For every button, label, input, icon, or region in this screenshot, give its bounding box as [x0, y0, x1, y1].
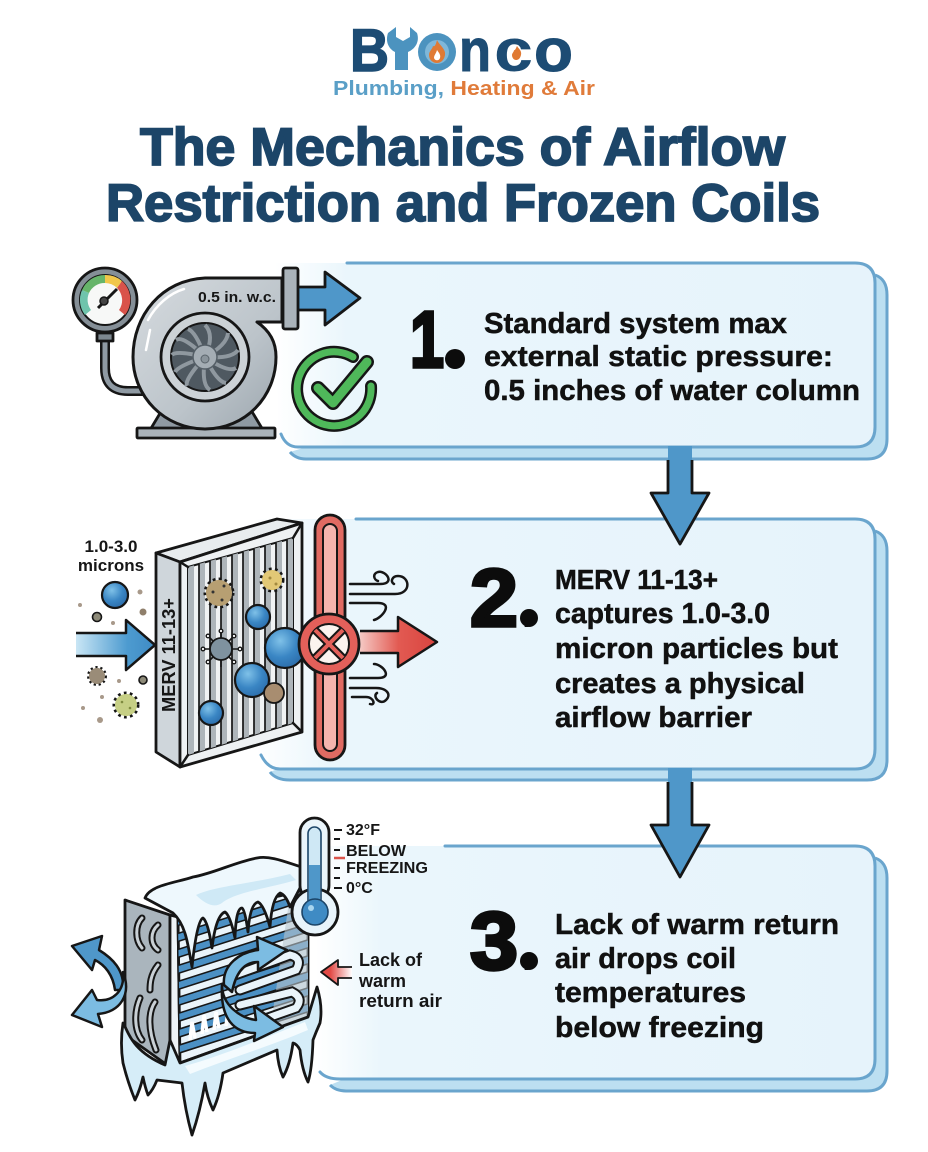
pollen particles: [89, 570, 284, 716]
step 1 text: [484, 308, 860, 407]
step 2 text: micron particles but: [555, 633, 838, 665]
icon: flame letter o: [418, 33, 456, 71]
panel 2 back card: [270, 531, 887, 780]
filter pleats: [188, 530, 293, 765]
step 1 text: Standard system max: [484, 308, 787, 340]
coil side plate: [125, 900, 180, 1067]
restriction valve: [299, 515, 359, 760]
return air arrow: [321, 960, 352, 985]
airflow in arrow: [76, 620, 155, 670]
temperature scale: FREEZING: [346, 860, 428, 877]
red airflow out arrow: [360, 617, 437, 667]
panel 1 back card: [290, 275, 887, 459]
step 3 text: temperatures: [555, 977, 746, 1009]
gauge pipe: [97, 333, 145, 391]
pump outlet flange: [283, 268, 298, 329]
panel: step 2: [255, 519, 887, 780]
title: [106, 118, 820, 233]
coil fins: [176, 891, 310, 1061]
virus particle: [201, 629, 242, 667]
step number 3: .: [523, 949, 530, 976]
illustration: MERV filter: [76, 515, 437, 767]
step 2 text: airflow barrier: [555, 702, 752, 734]
connector arrow 1 to 2: [651, 446, 709, 544]
panel: step 3: [315, 846, 887, 1091]
ice bottom with icicles: [122, 987, 321, 1135]
blue particles: [102, 582, 305, 725]
pressure gauge: [73, 268, 137, 332]
dust rings: [92, 612, 147, 684]
icon: wrench letter r: [387, 27, 418, 70]
logo tagline: Plumbing, Heating & Air: [333, 78, 595, 100]
pressure label: 0.5 in. w.c.: [198, 289, 276, 306]
thermometer: [292, 818, 338, 935]
temperature scale: BELOW: [346, 843, 407, 860]
logo wordmark: o: [534, 17, 573, 84]
panel 3 back card: [330, 858, 887, 1091]
step number 1: 1: [410, 295, 444, 384]
pump housing: [133, 278, 282, 429]
step number 1: .: [449, 344, 456, 374]
title: Restriction and Frozen Coils: [106, 174, 820, 233]
step 3 text: below freezing: [555, 1012, 764, 1044]
panel: step 1: [275, 263, 887, 459]
impeller: [161, 313, 249, 401]
temperature scale: [334, 822, 428, 897]
small dust particles: [78, 590, 146, 723]
ice top: [145, 857, 308, 967]
wind lines: [350, 572, 407, 704]
title: The Mechanics of Airflow: [140, 118, 786, 177]
swirl airflow arrows in coil: [222, 937, 287, 1041]
step 2 text: creates a physical: [555, 668, 805, 700]
illustration: blower pump: [73, 268, 371, 438]
step 3 text: [555, 909, 839, 1044]
step 3 text: air drops coil: [555, 943, 736, 975]
return air label: return air: [359, 991, 442, 1011]
step number 2: [470, 553, 538, 644]
icon: green check: [297, 352, 371, 426]
illustration: frozen coil: [72, 818, 442, 1135]
micron label: 1.0-3.0: [85, 537, 137, 556]
connector arrow 2 to 3: [651, 768, 709, 877]
step number 3: 3: [470, 896, 518, 987]
logo wordmark: [350, 17, 573, 84]
icon: small flame: [512, 46, 521, 60]
logo: [333, 17, 595, 100]
logo wordmark: B: [350, 17, 389, 84]
step 1 text: 0.5 inches of water column: [484, 375, 860, 407]
logo wordmark: c: [494, 17, 533, 84]
icon: airflow arrow: [296, 272, 360, 325]
temperature scale: 32°F: [346, 822, 380, 839]
step 1 text: external static pressure:: [484, 341, 833, 373]
micron label: [78, 537, 144, 575]
U-bend tubes: [235, 955, 299, 1020]
step 2 text: [555, 564, 838, 734]
return air label: Lack of: [359, 950, 423, 970]
return air label: warm: [358, 971, 406, 991]
micron label: microns: [78, 556, 144, 575]
return air label: [358, 950, 442, 1011]
step number 2: .: [523, 606, 530, 633]
logo wordmark: n: [459, 17, 491, 84]
step 2 text: captures 1.0-3.0: [555, 598, 770, 630]
step 2 text: MERV 11-13+: [555, 564, 718, 595]
step 3 text: Lack of warm return: [555, 909, 839, 941]
panel 1 front card: [275, 263, 875, 447]
step number 3: [470, 896, 538, 987]
panel 2 front card: [255, 519, 875, 769]
left airflow arrows: [72, 936, 126, 1027]
housing highlights: [146, 289, 184, 350]
filter frame: [156, 519, 302, 767]
pump base: [137, 400, 275, 438]
filter label: MERV 11-13+: [159, 598, 179, 712]
temperature scale: 0°C: [346, 880, 373, 897]
step number 2: 2: [470, 553, 518, 644]
panel 3 front card: [315, 846, 875, 1079]
